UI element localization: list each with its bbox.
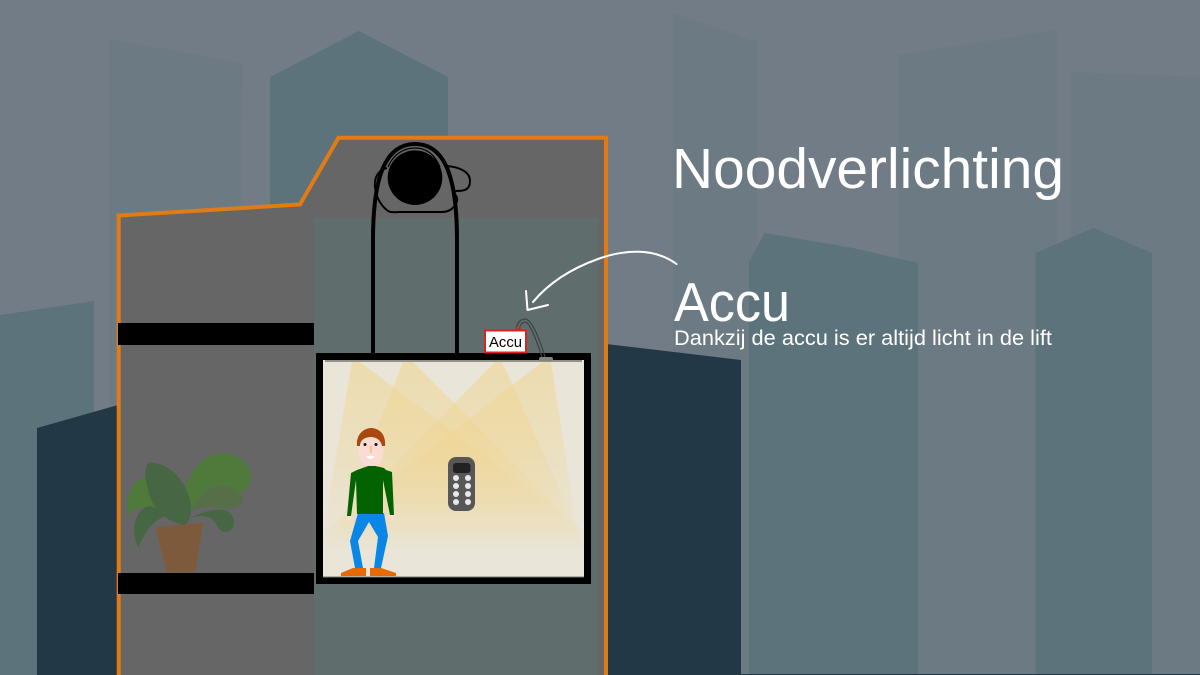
sweater bbox=[347, 465, 394, 516]
nose bbox=[370, 446, 372, 453]
building cross-section with orange outline bbox=[118, 138, 606, 675]
ceiling lights beams bbox=[323, 362, 582, 542]
emergency lamp bbox=[539, 357, 553, 361]
legs bbox=[350, 513, 388, 568]
eyes bbox=[364, 443, 378, 446]
battery label bbox=[485, 330, 526, 352]
title: Noodverlichting bbox=[672, 137, 1064, 201]
hands bbox=[347, 514, 352, 521]
battery label: Accu bbox=[489, 335, 522, 351]
lift control panel bbox=[448, 457, 475, 511]
plant bbox=[127, 453, 251, 573]
leaves bbox=[127, 453, 251, 547]
description: Dankzij de accu is er altijd licht in de lift bbox=[674, 327, 1052, 350]
lift car bbox=[316, 353, 591, 584]
pot bbox=[156, 523, 203, 573]
section heading: Accu bbox=[674, 271, 790, 333]
lift shaft bbox=[314, 218, 598, 675]
smile bbox=[366, 456, 375, 459]
hair bbox=[357, 428, 385, 446]
arrow pointing to battery bbox=[526, 252, 676, 310]
person bbox=[341, 428, 396, 576]
shoes bbox=[341, 568, 366, 576]
hoisting machine with cables bbox=[373, 144, 470, 354]
battery wires bbox=[516, 319, 545, 357]
upper floor slab bbox=[118, 323, 314, 345]
lower floor slab bbox=[118, 573, 314, 594]
head bbox=[358, 438, 384, 466]
